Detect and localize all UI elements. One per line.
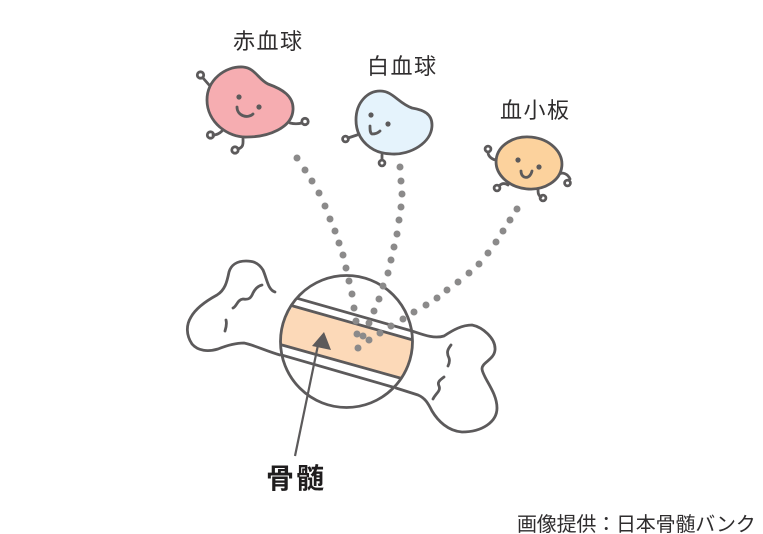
label: bone marrow: 骨髄 <box>266 463 326 494</box>
character: white blood cell <box>343 91 432 166</box>
magnifier circle <box>280 276 412 408</box>
label: red blood cell: 赤血球 <box>233 29 304 54</box>
character: red blood cell <box>197 67 308 153</box>
bone outline <box>187 261 280 355</box>
arrow: pointing to bone marrow <box>295 332 331 456</box>
bone wall lines <box>282 298 412 388</box>
label: white blood cell: 白血球 <box>367 54 438 79</box>
infographic: bone marrow produces blood cells <box>186 30 754 533</box>
bone with magnified marrow section <box>187 261 497 432</box>
dotted stream: from marrow to white blood cell <box>366 164 406 326</box>
marrow band <box>282 307 412 377</box>
dotted stream: from marrow to platelet <box>376 206 520 336</box>
label: platelet: 血小板 <box>500 98 571 123</box>
character: platelet <box>485 134 570 201</box>
bone surface marks <box>225 285 451 399</box>
dotted stream: from marrow to red blood cell <box>294 154 372 352</box>
